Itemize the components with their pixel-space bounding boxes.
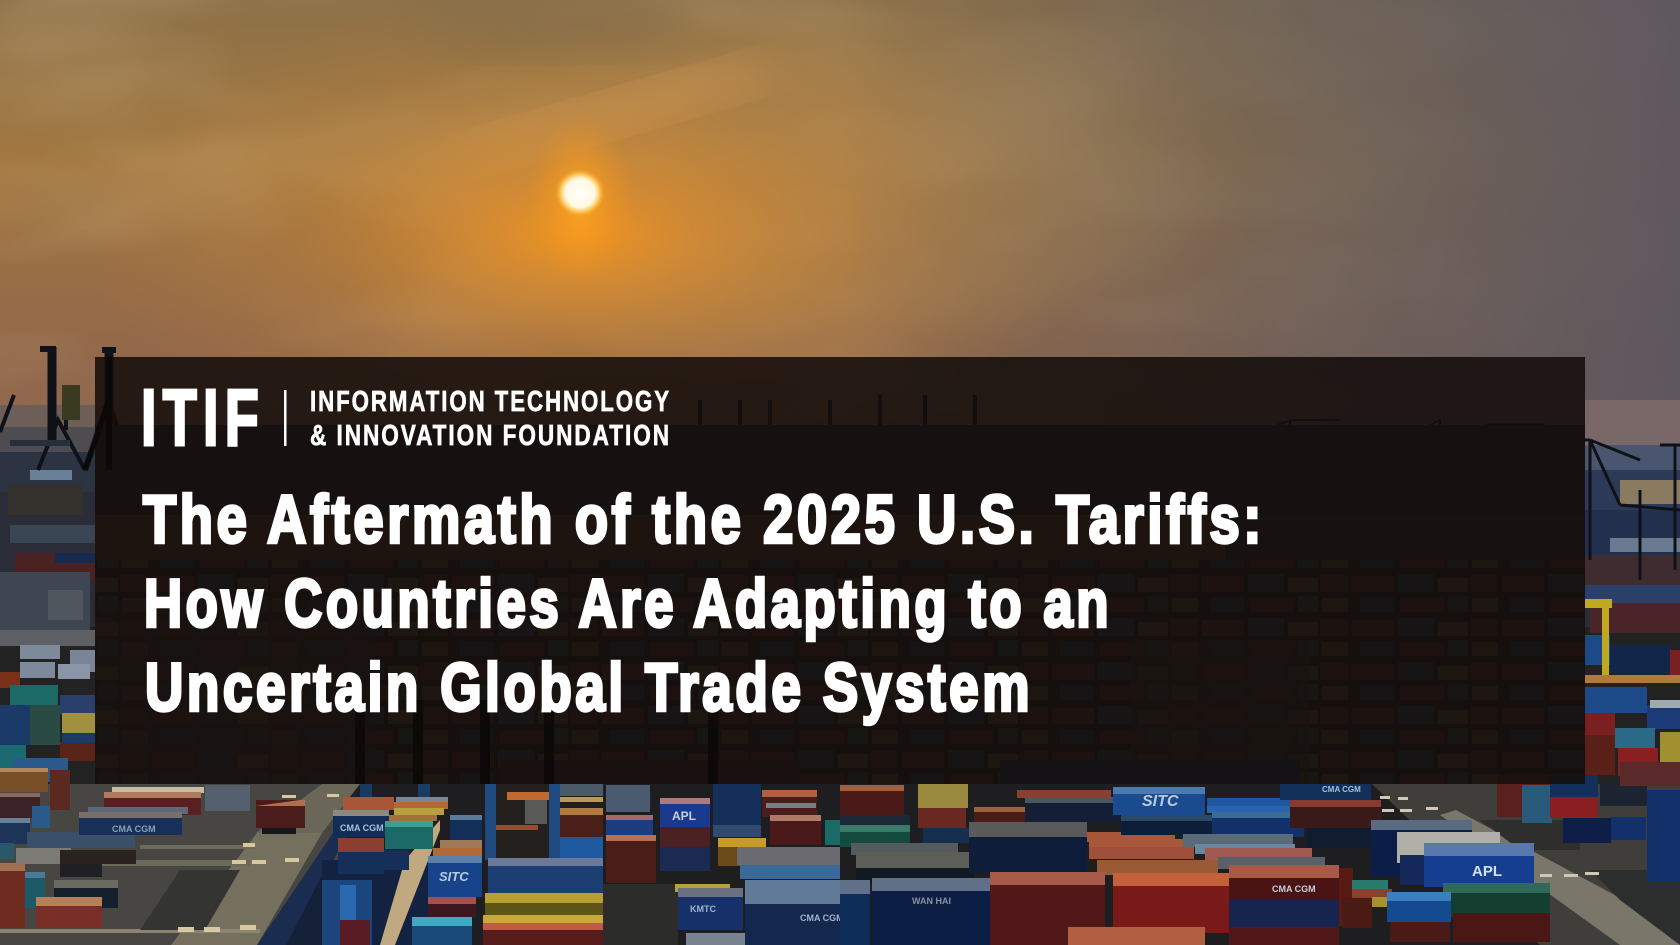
logo wordmark: INFORMATION TECHNOLOGY: [310, 386, 671, 418]
containers: centre of yard: SITC: [439, 869, 469, 884]
logo: ITIF: [141, 373, 671, 462]
containers: centre of yard: CMA CGM: [340, 823, 384, 833]
containers: right of yard: SITC: [1142, 793, 1179, 810]
containers: right of yard: CMA CGM: [1272, 884, 1316, 894]
containers: centre of yard: [257, 784, 844, 945]
containers: right of yard: WAN HAI: [912, 896, 951, 906]
dark title panel: [95, 357, 1585, 784]
sun: [525, 115, 635, 285]
yellow gantry: [1585, 599, 1612, 675]
containers: right of yard: CMA CGM: [1322, 785, 1361, 794]
logo: ITIF: ITIF: [141, 373, 265, 462]
containers: right of yard: APL: [1472, 863, 1502, 880]
title: How Countries Are Adapting to an: [144, 566, 1112, 642]
containers: right of yard: [840, 762, 1680, 945]
crane silhouettes over panel: [85, 357, 713, 784]
container: yellow and red stack: [483, 858, 603, 945]
containers: left of yard: [0, 768, 305, 928]
title: The Aftermath of the 2025 U.S. Tariffs:: [143, 482, 1265, 558]
containers: centre of yard: CMA CGM: [800, 913, 844, 923]
title: Uncertain Global Trade System: [145, 650, 1033, 726]
port background: cranes and distant yard: [0, 346, 1680, 784]
logo wordmark: [310, 386, 671, 452]
container yard: ground and roads: [0, 784, 1680, 945]
logo wordmark: & INNOVATION FOUNDATION: [310, 420, 671, 452]
distant right strip containers: [1585, 445, 1680, 470]
title: [143, 482, 1265, 726]
containers: centre of yard: KMTC: [690, 904, 716, 914]
crane silhouettes: [0, 347, 1680, 580]
containers: centre of yard: APL: [672, 809, 696, 823]
sky: [0, 0, 1680, 480]
yard under panel: [95, 425, 1585, 515]
logo divider: [284, 390, 286, 446]
containers: left of yard: CMA CGM: [112, 824, 156, 834]
